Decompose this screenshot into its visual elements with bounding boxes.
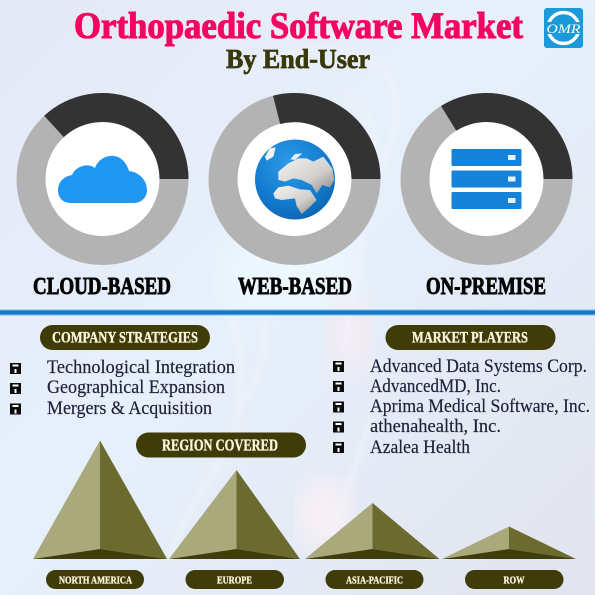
item: Azalea Health <box>370 438 470 458</box>
panel: cloud-based <box>31 93 188 300</box>
label: ON-PREMISE <box>426 274 546 300</box>
bullet <box>333 361 344 372</box>
label: europe <box>186 570 284 589</box>
donut chart: web-based <box>223 93 381 251</box>
heading pill: REGION COVERED <box>162 436 278 455</box>
label: north america <box>46 570 144 589</box>
list <box>10 358 235 419</box>
label: europe: EUROPE <box>217 574 252 586</box>
item: Technological Integration <box>47 358 235 378</box>
pyramid: north america <box>33 440 167 559</box>
heading pill <box>40 325 210 350</box>
panel: company strategies <box>10 325 235 419</box>
heading pill: MARKET PLAYERS <box>412 330 528 347</box>
heading pill: COMPANY STRATEGIES <box>52 330 198 347</box>
heading pill <box>136 432 306 458</box>
panel: region covered <box>33 432 576 589</box>
icon: cloud <box>58 156 147 203</box>
panel: web-based <box>223 93 381 300</box>
heading pill <box>386 325 556 350</box>
divider <box>0 310 595 316</box>
label: asia-pacific: ASIA-PACIFIC <box>346 574 403 586</box>
bullet <box>10 383 21 394</box>
logo: OMR <box>546 21 581 36</box>
icon: server <box>452 149 522 209</box>
icon: globe <box>255 140 335 220</box>
item: AdvancedMD, Inc. <box>370 377 501 397</box>
bullet <box>333 402 344 412</box>
item: athenahealth, Inc. <box>370 417 501 437</box>
title: Orthopaedic Software Market <box>74 6 524 47</box>
pyramid: asia-pacific <box>305 503 440 559</box>
label: asia-pacific <box>326 570 424 589</box>
panel: on-premise <box>415 93 573 300</box>
item: Mergers & Acquisition <box>47 399 212 419</box>
item: Aprima Medical Software, Inc. <box>370 397 590 417</box>
bullet <box>333 442 344 453</box>
pyramid: europe <box>169 470 300 559</box>
donut chart: cloud-based <box>31 93 188 250</box>
item: Geographical Expansion <box>47 378 225 398</box>
logo <box>544 8 583 48</box>
bullet <box>333 381 344 392</box>
bullet <box>10 363 21 374</box>
donut chart: on-premise <box>415 93 573 250</box>
label: CLOUD-BASED <box>33 274 171 300</box>
bullet <box>333 422 344 432</box>
subtitle: By End-User <box>226 44 370 74</box>
list <box>333 357 590 458</box>
bullet <box>10 404 21 414</box>
label: north america: NORTH AMERICA <box>59 574 132 586</box>
item: Advanced Data Systems Corp. <box>370 357 587 377</box>
pyramid: row <box>442 526 576 559</box>
panel: market players <box>333 325 590 458</box>
label: row: ROW <box>504 574 524 586</box>
label: row <box>465 570 564 589</box>
label: WEB-BASED <box>238 274 352 300</box>
